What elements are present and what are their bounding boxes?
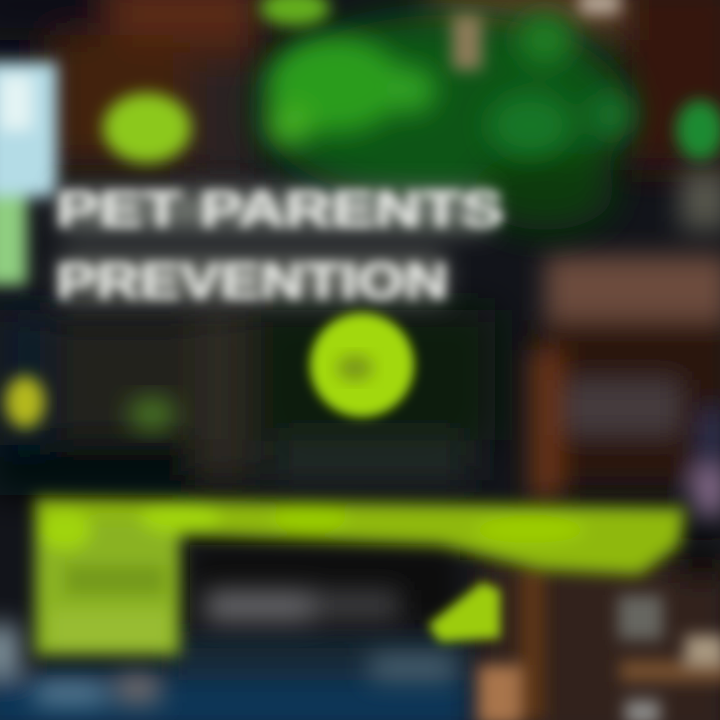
background: wooden room [0,0,720,495]
banner bar [35,498,685,575]
banner highlights [39,510,91,550]
green circle badge [310,313,414,417]
title text: PREVENTION [56,253,448,309]
banner left panel [35,520,180,655]
title block [56,181,504,309]
plant tip and pale accents [260,0,720,160]
title backdrop [60,190,490,300]
plant foliage [260,15,630,230]
small green leaf [128,398,176,430]
green triangle marker [428,582,500,642]
green object upper left [103,93,191,163]
green banner [35,498,685,655]
background: lower area [0,540,720,720]
right side wooden shelves [530,170,720,515]
title text [56,181,504,309]
window at left [0,62,57,285]
title text: PET PARENTS [56,181,504,237]
small yellow icon [5,376,45,428]
badge center [337,355,373,381]
